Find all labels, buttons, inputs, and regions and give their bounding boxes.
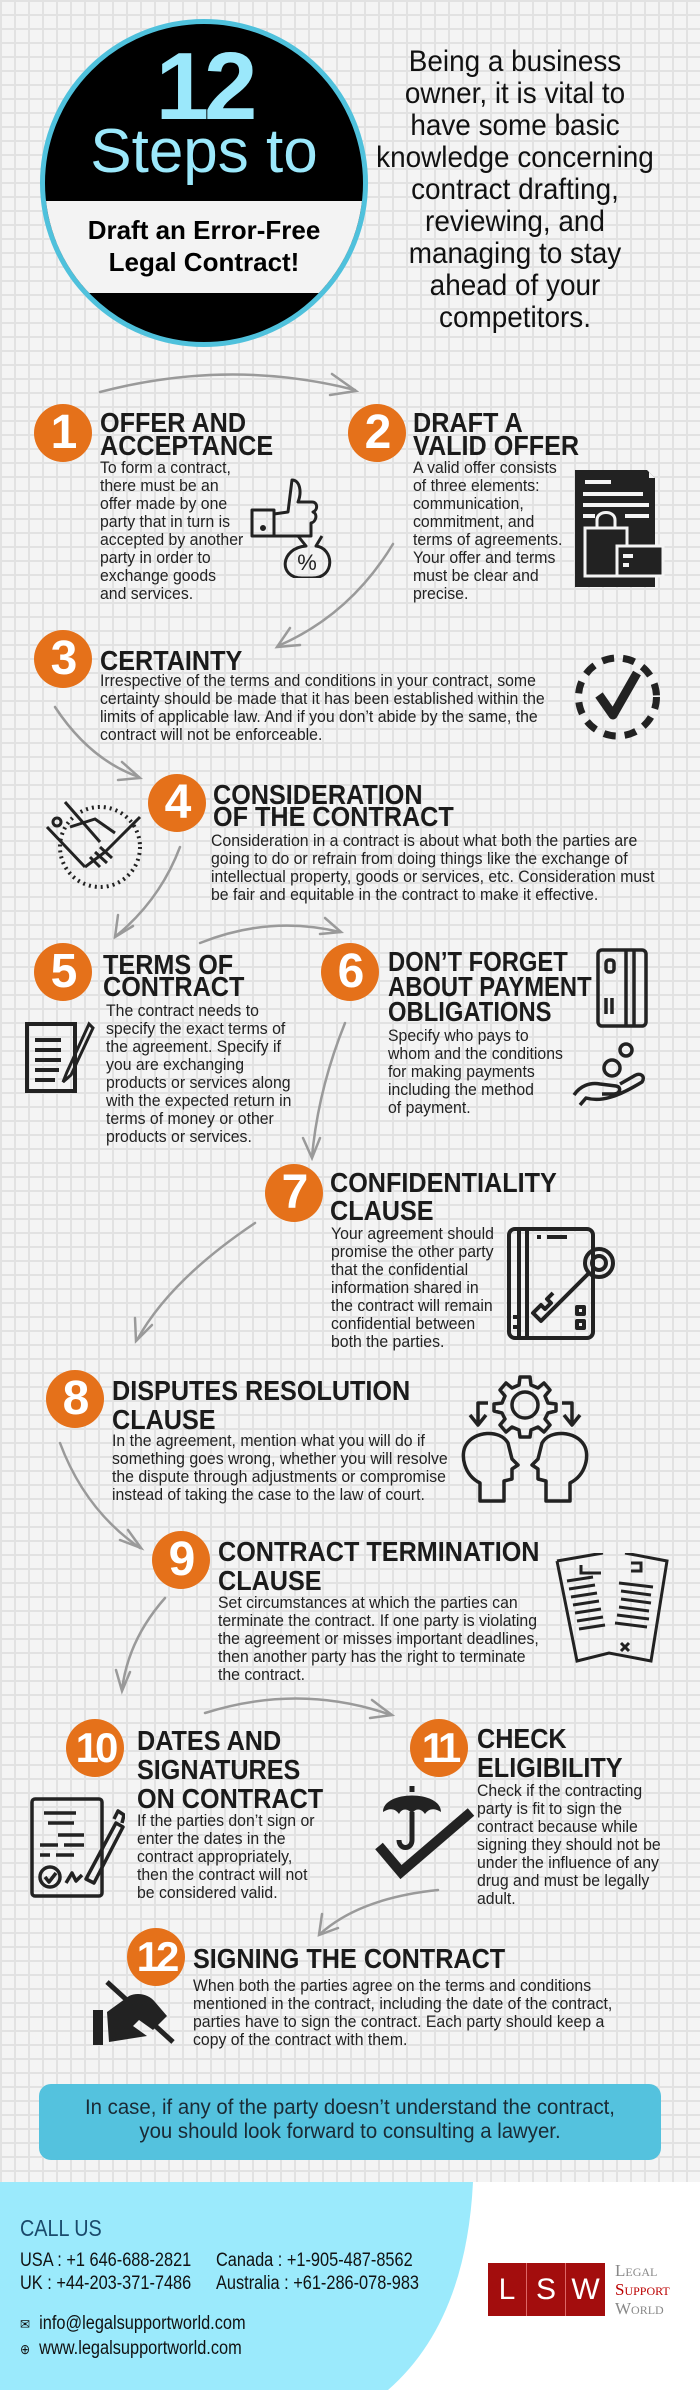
body 8 xyxy=(112,1431,448,1504)
heading 2 xyxy=(413,407,579,461)
website: ⊕ www.legalsupportworld.com xyxy=(20,2338,242,2359)
body 5: the agreement. Specify if xyxy=(106,1037,281,1056)
body 5: products or services. xyxy=(106,1127,252,1146)
number 9: 9 xyxy=(169,1533,193,1586)
footer panel xyxy=(0,2182,700,2390)
contact info xyxy=(20,2215,440,2365)
body 1: there must be an xyxy=(100,476,219,495)
body 12 xyxy=(193,1977,612,2049)
phone numbers intl: Canada : +1-905-487-8562 xyxy=(216,2250,413,2271)
step 8 xyxy=(46,1370,588,1504)
number 2: 2 xyxy=(365,406,389,459)
body 9 xyxy=(218,1593,539,1684)
icon: torn contract xyxy=(556,1553,669,1663)
subtitle band xyxy=(45,201,363,293)
number 7: 7 xyxy=(282,1166,306,1219)
arrow: step 9 to 10 xyxy=(116,1598,165,1691)
icon: book with key xyxy=(507,1227,615,1340)
callout text xyxy=(10,2096,690,2144)
body 12: parties have to sign the contract. Each party should keep a xyxy=(193,2012,604,2031)
number 6 xyxy=(321,943,379,1001)
arrow: step 11 to 12 xyxy=(319,1890,438,1935)
heading 2: VALID OFFER xyxy=(413,430,579,461)
number 8: 8 xyxy=(63,1372,87,1425)
body 4 xyxy=(211,831,654,904)
body 5: The contract needs to xyxy=(106,1001,259,1020)
body 9: the contract. xyxy=(218,1665,305,1684)
icon: thumbs up with money bag: % xyxy=(297,550,317,575)
step 1 xyxy=(34,404,332,603)
heading 2: DRAFT A xyxy=(413,407,523,438)
heading 8: DISPUTES RESOLUTION xyxy=(112,1375,410,1406)
heading 5: TERMS OF xyxy=(103,949,233,980)
body 3: limits of applicable law. And if you don’t abide by the same, the xyxy=(100,707,538,726)
body 11: Check if the contracting xyxy=(477,1781,642,1800)
body 8: the dispute through adjustments or compromise xyxy=(112,1467,446,1486)
body 11: party is fit to sign the xyxy=(477,1799,622,1818)
number 9 xyxy=(152,1531,210,1589)
number 12: 12 xyxy=(137,1933,175,1980)
logo boxes xyxy=(488,2263,605,2316)
call us heading: CALL US xyxy=(20,2215,102,2241)
body 9: then another party has the right to terminate xyxy=(218,1647,526,1666)
body 6: whom and the conditions xyxy=(388,1044,563,1063)
body 7: information shared in xyxy=(331,1278,479,1297)
body 1: To form a contract, xyxy=(100,458,231,477)
heading 3: CERTAINTY xyxy=(100,645,242,676)
body 10: then the contract will not xyxy=(137,1865,307,1884)
body 3: contract will not be enforceable. xyxy=(100,725,322,744)
phone numbers intl xyxy=(216,2249,419,2295)
logo boxes: W xyxy=(571,2273,600,2306)
icon: document with bag and card xyxy=(575,470,664,587)
body 8: instead of taking the case to the law of court. xyxy=(112,1485,425,1504)
body 11: signing they should not be xyxy=(477,1835,661,1854)
step 4 xyxy=(46,774,654,904)
body 9: terminate the contract. If one party is violating xyxy=(218,1611,537,1630)
step 2 xyxy=(348,404,664,603)
subtitle text: Legal Contract! xyxy=(109,247,299,277)
icon: dashed circle check xyxy=(575,654,660,740)
body 12: mentioned in the contract, including the date of the contract, xyxy=(193,1994,612,2013)
body 2: precise. xyxy=(413,584,468,603)
heading 10: ON CONTRACT xyxy=(137,1783,323,1814)
arrow: intro to step 1 xyxy=(100,374,356,395)
intro text: managing to stay xyxy=(409,237,621,270)
heading 4 xyxy=(213,779,454,832)
heading 8 xyxy=(112,1375,410,1435)
body 12: When both the parties agree on the terms and conditions xyxy=(193,1976,591,1995)
heading 6: DON’T FORGET xyxy=(388,946,568,977)
step 11 xyxy=(375,1719,675,1909)
heading 4: OF THE CONTRACT xyxy=(213,801,454,832)
body 1: accepted by another xyxy=(100,530,243,549)
step 7 xyxy=(265,1164,615,1351)
body 2: commitment, and xyxy=(413,512,534,531)
email: ✉ info@legalsupportworld.com xyxy=(20,2313,246,2334)
body 10: be considered valid. xyxy=(137,1883,278,1902)
arrow: step 10 to 11 xyxy=(205,1698,392,1718)
number 11 xyxy=(410,1719,468,1777)
icon: hand writing xyxy=(93,1980,180,2045)
body 8: In the agreement, mention what you will do if xyxy=(112,1431,425,1450)
body 6: for making payments xyxy=(388,1062,535,1081)
icon: gear and heads xyxy=(462,1375,588,1503)
body 2: terms of agreements. xyxy=(413,530,562,549)
body 6 xyxy=(388,1026,563,1117)
callout text: you should look forward to consulting a lawyer. xyxy=(139,2120,561,2143)
phone numbers xyxy=(20,2249,191,2295)
icon: document with pencil xyxy=(25,1021,95,1093)
body 10: enter the dates in the xyxy=(137,1829,286,1848)
body 4: Consideration in a contract is about what both the parties are xyxy=(211,831,637,850)
number 10 xyxy=(66,1719,124,1777)
number 11: 11 xyxy=(422,1724,456,1771)
step 6 xyxy=(321,943,648,1117)
body 5: terms of money or other xyxy=(106,1109,274,1128)
body 1: exchange goods xyxy=(100,566,216,585)
heading 11 xyxy=(477,1724,623,1782)
number 4 xyxy=(148,774,206,832)
arrow: step 6 to 7 xyxy=(303,1023,345,1158)
number 12 xyxy=(127,1928,185,1986)
body 7: promise the other party xyxy=(331,1242,494,1261)
title: Steps to: Steps to xyxy=(90,117,318,186)
arrow: step 4 to 5 xyxy=(115,847,180,937)
subtitle text xyxy=(88,215,320,277)
heading 1 xyxy=(100,407,273,461)
body 7: confidential between xyxy=(331,1314,475,1333)
body 11 xyxy=(477,1782,661,1908)
number 7 xyxy=(265,1164,323,1222)
heading 11: CHECK xyxy=(477,1723,567,1754)
icon: signed document xyxy=(30,1797,125,1898)
body 5 xyxy=(106,1001,291,1146)
body 6: Specify who pays to xyxy=(388,1026,529,1045)
body 5: specify the exact terms of xyxy=(106,1019,285,1038)
body 11: under the influence of any xyxy=(477,1853,659,1872)
intro text: Being a business xyxy=(409,45,621,78)
body 7 xyxy=(331,1224,494,1351)
icon: card xyxy=(596,948,648,1028)
icon: thumbs up with money bag xyxy=(250,478,332,578)
arrow: step 7 to 8 xyxy=(135,1223,255,1341)
callout text: In case, if any of the party doesn’t understand the contract, xyxy=(85,2096,615,2119)
body 8: something goes wrong, whether you will resolve xyxy=(112,1449,448,1468)
number 4: 4 xyxy=(165,776,189,829)
logo wordmark xyxy=(615,2261,670,2318)
title circle xyxy=(40,19,368,347)
intro text: ahead of your xyxy=(430,269,600,302)
icon: handshake xyxy=(46,801,142,889)
phone numbers: USA : +1 646-688-2821 xyxy=(20,2250,191,2271)
body 3 xyxy=(100,671,545,744)
body 4: be fair and equitable in the contract to make it effective. xyxy=(211,885,598,904)
icon: umbrella with check xyxy=(375,1782,475,1880)
heading 9: CLAUSE xyxy=(218,1565,322,1596)
arrow: step 2 to 3 xyxy=(277,544,393,647)
arrow: step 8 to 9 xyxy=(60,1443,141,1548)
heading 11: ELIGIBILITY xyxy=(477,1752,623,1783)
phone numbers intl: Australia : +61-286-078-983 xyxy=(216,2273,419,2294)
logo wordmark: Legal xyxy=(615,2261,657,2280)
heading 10 xyxy=(137,1725,323,1814)
step 10 xyxy=(30,1719,323,1902)
body 2: of three elements: xyxy=(413,476,540,495)
heading 5: CONTRACT xyxy=(103,971,244,1002)
heading 7 xyxy=(330,1167,557,1226)
body 2: communication, xyxy=(413,494,524,513)
subtitle text: Draft an Error-Free xyxy=(88,215,320,245)
number 2 xyxy=(348,404,406,462)
heading 7: CLAUSE xyxy=(330,1195,434,1226)
logo boxes: L xyxy=(499,2273,515,2306)
body 6: of payment. xyxy=(388,1098,471,1117)
step 5 xyxy=(25,943,291,1146)
heading 8: CLAUSE xyxy=(112,1404,216,1435)
body 4: going to do or refrain from doing things like the exchange of xyxy=(211,849,628,868)
body 11: contract because while xyxy=(477,1817,638,1836)
logo xyxy=(488,2263,688,2318)
callout: consult a lawyer xyxy=(39,2084,661,2160)
body 9: Set circumstances at which the parties can xyxy=(218,1593,518,1612)
body 6: including the method xyxy=(388,1080,534,1099)
body 5: with the expected return in xyxy=(106,1091,291,1110)
logo boxes: S xyxy=(536,2273,556,2306)
body 10: contract appropriately, xyxy=(137,1847,292,1866)
number 1 xyxy=(34,404,92,462)
body 4: intellectual property, goods or services, etc. Consideration must xyxy=(211,867,654,886)
body 3: certainty should be made that it has been established within the xyxy=(100,689,545,708)
body 2 xyxy=(413,458,562,603)
icon: hand with coins xyxy=(572,1042,646,1106)
number 10: 10 xyxy=(76,1724,114,1771)
body 12: copy of the contract with them. xyxy=(193,2030,407,2049)
heading 9: CONTRACT TERMINATION xyxy=(218,1536,539,1567)
body 7: that the confidential xyxy=(331,1260,468,1279)
body 10 xyxy=(137,1812,315,1902)
body 1: party in order to xyxy=(100,548,211,567)
body 1: and services. xyxy=(100,584,193,603)
body 1: offer made by one xyxy=(100,494,227,513)
body 7: the contract will remain xyxy=(331,1296,493,1315)
heading 10: DATES AND xyxy=(137,1725,281,1756)
heading 10: SIGNATURES xyxy=(137,1754,300,1785)
intro text: competitors. xyxy=(439,301,591,334)
heading 12: SIGNING THE CONTRACT xyxy=(193,1943,505,1974)
body 10: If the parties don’t sign or xyxy=(137,1811,315,1830)
intro text: reviewing, and xyxy=(425,205,605,238)
intro text xyxy=(376,45,654,334)
heading 1: OFFER AND xyxy=(100,407,246,438)
arrow: step 3 to 4 xyxy=(55,707,140,780)
phone numbers: UK : +44-203-371-7486 xyxy=(20,2273,191,2294)
body 7: Your agreement should xyxy=(331,1224,494,1243)
body 1 xyxy=(100,458,243,603)
heading 4: CONSIDERATION xyxy=(213,779,423,810)
number 3: 3 xyxy=(51,632,75,685)
body 7: both the parties. xyxy=(331,1332,444,1351)
body 2: must be clear and xyxy=(413,566,539,585)
body 2: A valid offer consists xyxy=(413,458,557,477)
intro text: owner, it is vital to xyxy=(405,77,625,110)
heading 1: ACCEPTANCE xyxy=(100,430,273,461)
intro text: knowledge concerning xyxy=(376,141,654,174)
number 1: 1 xyxy=(51,406,75,459)
body 2: Your offer and terms xyxy=(413,548,555,567)
logo wordmark: Support xyxy=(615,2280,670,2299)
heading 6 xyxy=(388,946,592,1027)
heading 6: OBLIGATIONS xyxy=(388,996,552,1027)
title: 12: 12 xyxy=(156,33,252,140)
arrow: step 5 to 6 xyxy=(200,918,341,943)
step 12 xyxy=(93,1928,633,2048)
body 5: products or services along xyxy=(106,1073,291,1092)
intro text: have some basic xyxy=(410,109,620,142)
number 3 xyxy=(34,630,92,688)
body 11: adult. xyxy=(477,1889,516,1908)
logo wordmark: World xyxy=(615,2299,664,2318)
heading 6: ABOUT PAYMENT xyxy=(388,971,592,1002)
body 1: party that in turn is xyxy=(100,512,230,531)
step 9 xyxy=(152,1531,669,1684)
intro text: contract drafting, xyxy=(411,173,619,206)
body 11: drug and must be legally xyxy=(477,1871,649,1890)
number 8 xyxy=(46,1370,104,1428)
heading 9 xyxy=(218,1536,539,1596)
number 5 xyxy=(34,943,92,1001)
heading 7: CONFIDENTIALITY xyxy=(330,1167,557,1198)
body 5: you are exchanging xyxy=(106,1055,244,1074)
step 3 xyxy=(34,630,660,744)
body 3: Irrespective of the terms and conditions in your contract, some xyxy=(100,671,536,690)
number 6: 6 xyxy=(338,945,362,998)
body 9: the agreement or misses important deadlines, xyxy=(218,1629,539,1648)
number 5: 5 xyxy=(51,945,75,998)
heading 5 xyxy=(103,949,244,1002)
